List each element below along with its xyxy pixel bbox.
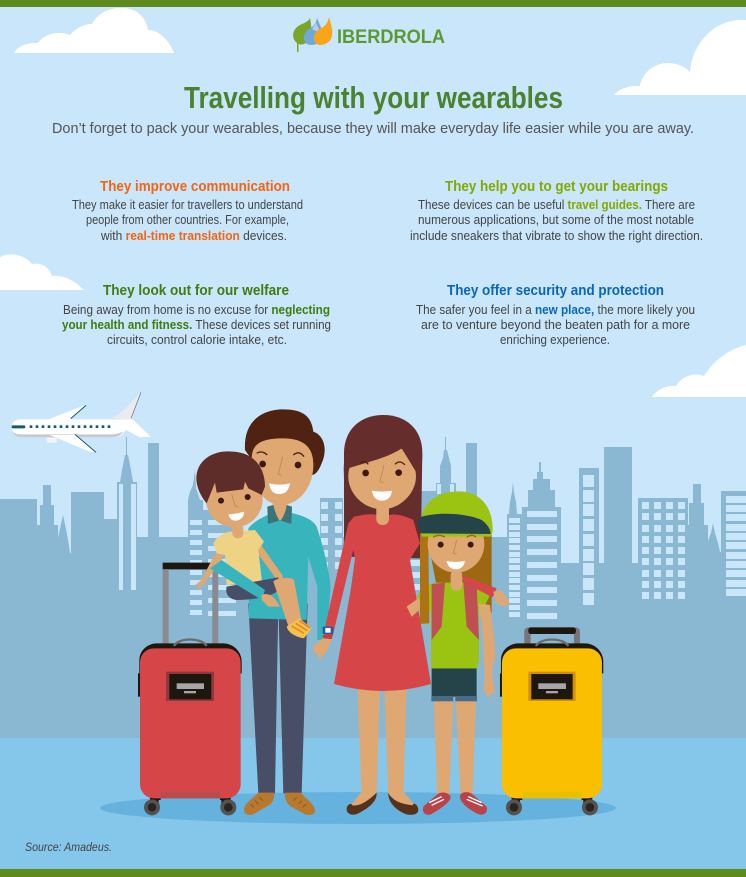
panel: welfare: circuits, control calorie intake, etc. [107, 333, 287, 347]
panel: security: are to venture beyond the beaten path for a more [421, 318, 690, 332]
logo: Iberdrola [293, 17, 445, 52]
panel: welfare: Being away from home is no excuse for neglecting [63, 303, 330, 317]
airplane [12, 392, 151, 452]
man: torso, head and hair [245, 409, 331, 640]
red suitcase [138, 563, 242, 815]
panel: bearings: These devices can be useful travel guides. There are [418, 198, 695, 212]
panel: communication: with real-time translation devices. [100, 229, 287, 243]
top bar [0, 0, 746, 7]
panel: bearings: numerous applications, but some of the most notable [418, 213, 694, 227]
bottom bar [0, 869, 746, 877]
city skyline [0, 437, 746, 740]
woman [312, 415, 431, 815]
panel: bearings: include sneakers that vibrate to show the right direction. [410, 229, 703, 243]
panel: security: They offer security and protection [447, 282, 664, 299]
panel: communication: They improve communication [100, 178, 290, 195]
boy [195, 451, 312, 638]
girl: legs, shorts, shoes and arm [423, 613, 495, 815]
panel: security: enriching experience. [500, 333, 610, 347]
clouds [0, 8, 746, 397]
source note: Source: Amadeus. [25, 840, 112, 854]
panel: communication: people from other countries. For example, [86, 213, 289, 227]
man [244, 409, 331, 815]
panel: welfare [62, 282, 331, 347]
panel: communication [72, 178, 303, 243]
panel: welfare: They look out for our welfare [103, 282, 289, 299]
title: Travelling with your wearables [184, 80, 563, 115]
panel: bearings: They help you to get your bearings [445, 178, 668, 195]
panel: security: The safer you feel in a new place, the more likely you [416, 303, 695, 317]
panel: bearings [410, 178, 703, 243]
ground shadow [100, 792, 616, 824]
girl [407, 491, 510, 815]
woman: hair, dress and arms [312, 415, 423, 660]
woman: legs and shoes [347, 683, 418, 815]
girl: hair, cap, face and shirt [407, 491, 510, 663]
yellow suitcase [500, 627, 603, 815]
ground [0, 738, 746, 869]
panel: welfare: your health and fitness. These devices set running [62, 318, 331, 332]
panel: communication: They make it easier for travellers to understand [72, 198, 303, 212]
logo: Iberdrola: IBERDROLA [337, 27, 445, 48]
man: legs and shoes [244, 603, 315, 815]
panel: security [416, 282, 695, 347]
woman: skirt hem [334, 560, 431, 691]
subtitle: Don’t forget to pack your wearables, because they will make everyday life easier while you are away. [52, 120, 694, 137]
